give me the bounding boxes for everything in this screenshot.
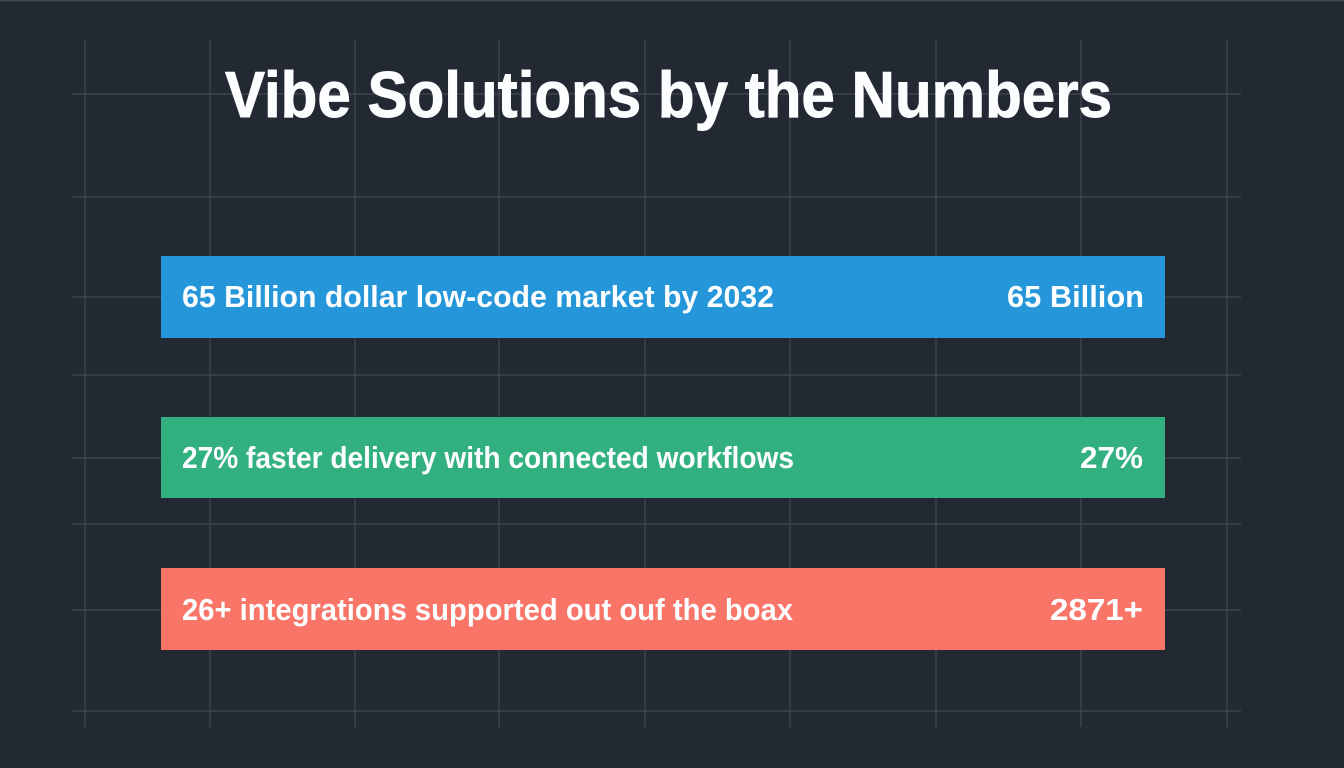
bar value: 2871+: 2871+ — [1050, 592, 1143, 627]
title: Vibe Solutions by the Numbers — [225, 58, 1112, 131]
bar: integrations — [161, 568, 1165, 650]
bar label: low-code market: 65 Billion dollar low-code market by 2032 — [182, 279, 774, 314]
bar value: 65 Billion: 65 Billion — [1007, 279, 1144, 314]
bar: low-code market — [161, 256, 1165, 338]
bar: faster delivery — [161, 417, 1165, 498]
bar label: integrations: 26+ integrations supported out ouf the boax — [182, 592, 794, 627]
bar label: faster delivery: 27% faster delivery with connected workflows — [182, 440, 794, 475]
bar value: 27%: 27% — [1080, 440, 1143, 475]
